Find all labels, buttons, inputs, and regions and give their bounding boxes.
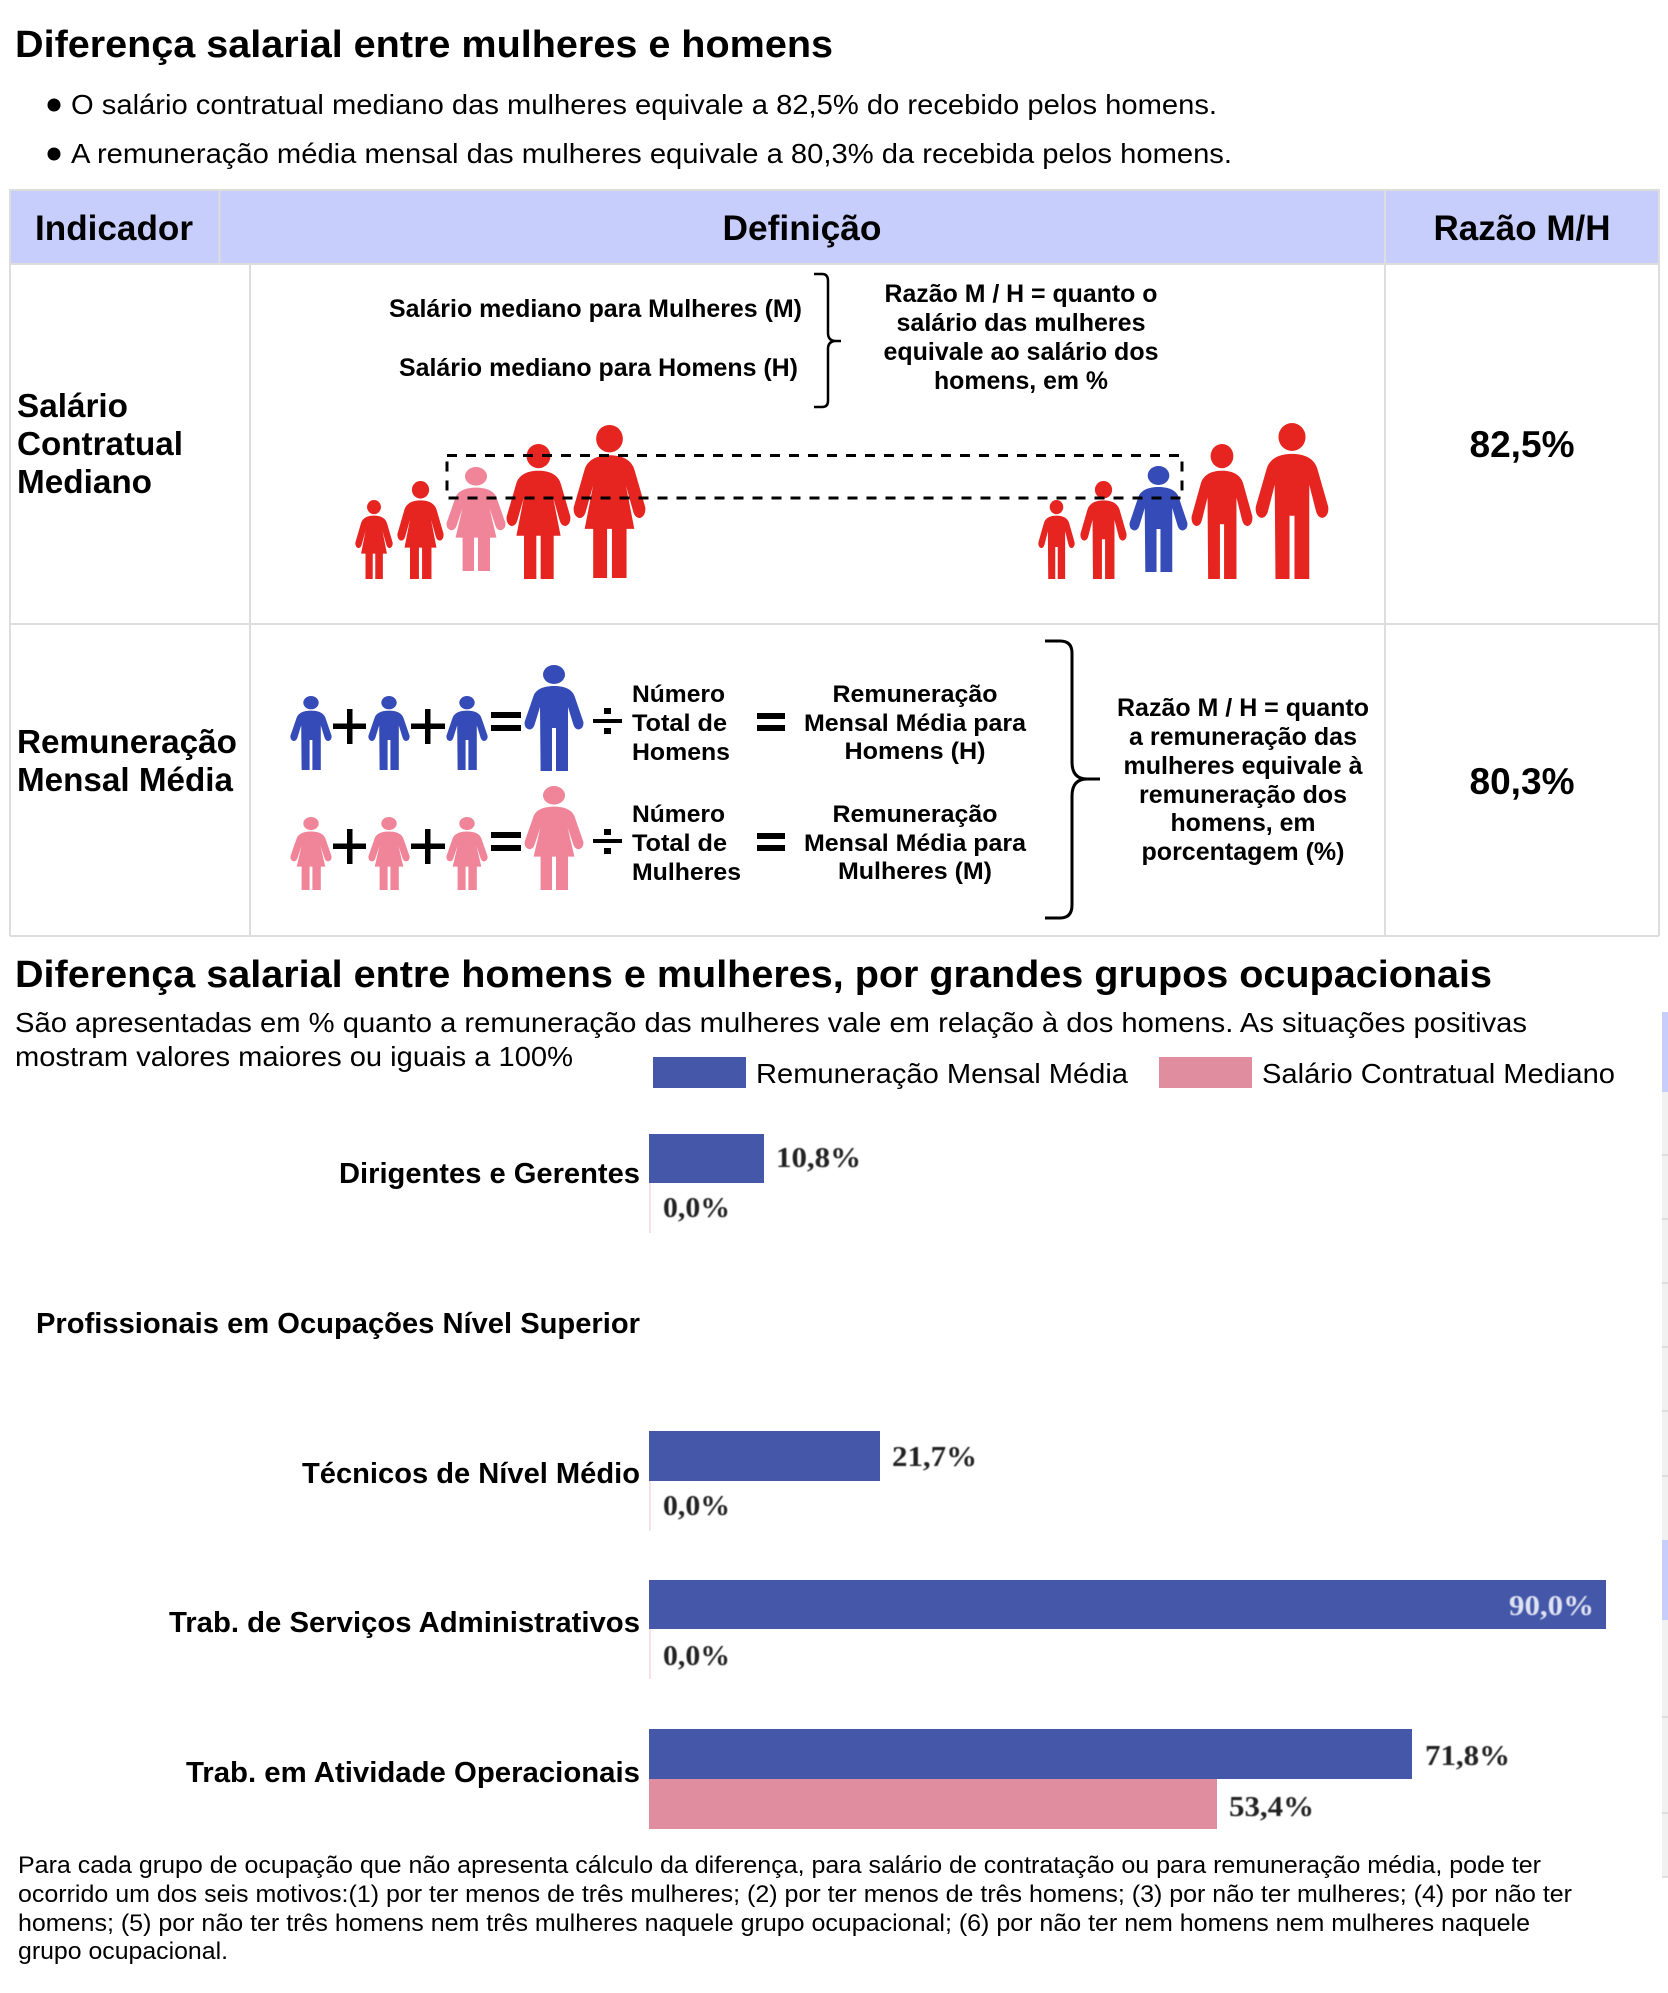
dashed median box [447,456,1182,498]
ratio definition: median: equivale ao salário dos [884,338,1158,366]
row label: Salário Contratual Mediano: Salário [17,387,128,424]
row label: Remuneração Mensal Média: Remuneração [17,723,237,760]
bars: Trab. em Atividade Operacionais: 71,8% [1425,1740,1510,1772]
ratio definition: average: homens, em [1170,809,1316,837]
ratio definition: median: Razão M / H = quanto o [884,280,1158,308]
median salary labels: Salário mediano para Homens (H) [399,354,798,382]
chart legend [653,1057,1615,1089]
bullet 2: A remuneração média mensal das mulheres equivale a 80,3% da recebida pelos homens. [71,138,1232,169]
category labels: Trab. em Atividade Operacionais [186,1757,640,1789]
ratio definition: average: Razão M / H = quanto [1117,694,1369,722]
median salary labels: Salário mediano para Mulheres (M) [389,295,802,323]
formula: men [290,665,1026,771]
bars: Trab. de Serviços Administrativos: 0,0% [663,1640,730,1672]
table header row: Razão M/H [1434,209,1610,248]
formula: women: Mensal Média para [804,830,1026,857]
value: 82,5%: 82,5% [1470,424,1574,465]
bar chart [36,1134,1606,1829]
median salary labels [389,295,802,382]
chart subtitle: mostram valores maiores ou iguais a 100% [15,1041,573,1072]
ratio definition: average: porcentagem (%) [1142,838,1344,866]
row label: Remuneração Mensal Média [17,723,237,798]
heading: occupational groups: Diferença salarial entre homens e mulheres, por grandes grupos ocupacionais [15,954,1492,996]
bars: Trab. em Atividade Operacionais: 53,4% [1229,1791,1314,1823]
cropped table sliver at right edge [1662,1012,1668,1877]
formula: women: Mulheres (M) [838,858,992,885]
bars: Trab. de Serviços Administrativos [649,1580,1606,1679]
ratio definition: average: remuneração dos [1139,781,1347,809]
footnote: homens; (5) por não ter três homens nem três mulheres naquele grupo ocupacional; (6) por não ter nem homens nem mulheres naquele [18,1910,1530,1937]
footnote: grupo ocupacional. [18,1938,228,1965]
bullet list [48,89,1232,169]
icons: men ranked by salary [1038,423,1328,579]
ratio definition: average: a remuneração das [1129,723,1357,751]
brace: median [814,274,841,407]
table header row: Indicador [35,209,193,248]
chart legend: Salário Contratual Mediano [1262,1058,1615,1089]
ratio definition: median [884,280,1158,395]
bars: Dirigentes e Gerentes [649,1134,861,1233]
brace: average [1045,641,1100,918]
bars: Dirigentes e Gerentes: 10,8% [776,1142,861,1174]
table header row: Definição [722,209,882,248]
chart legend: Remuneração Mensal Média [756,1058,1128,1089]
bars: Trab. em Atividade Operacionais [649,1729,1510,1829]
category labels [36,1158,640,1789]
title: wage gap: Diferença salarial entre mulheres e homens [15,24,833,66]
formula: women: Total de [632,830,727,857]
category labels: Técnicos de Nível Médio [302,1458,640,1490]
bars: Técnicos de Nível Médio [649,1431,977,1531]
chart subtitle [15,1007,1527,1072]
formula: women: Remuneração [832,801,998,828]
formula: men: Total de [632,710,727,737]
formula: women [290,786,1026,890]
formula: men: Homens [632,739,730,766]
value: 80,3%: 80,3% [1470,761,1574,802]
category labels: Trab. de Serviços Administrativos [169,1607,640,1639]
bars: Trab. de Serviços Administrativos: 90,0% [1509,1590,1594,1622]
formula: men: Número [632,681,725,708]
ratio definition: average: mulheres equivale à [1124,752,1363,780]
formula: men: Homens (H) [844,738,986,765]
row label: Salário Contratual Mediano: Mediano [17,463,152,500]
formula: men: Remuneração [832,681,998,708]
footnote: ocorrido um dos seis motivos:(1) por ter menos de três mulheres; (2) por ter menos de três homens; (3) por não ter mulheres; (4) por não ter [18,1881,1572,1908]
category labels: Dirigentes e Gerentes [339,1158,640,1190]
icons: women ranked by salary [355,425,645,579]
row label: Salário Contratual Mediano [17,387,183,500]
category labels: Profissionais em Ocupações Nível Superior [36,1308,640,1340]
bars: Técnicos de Nível Médio: 0,0% [663,1490,730,1522]
ratio definition: average [1117,694,1369,866]
ratio definition: median: homens, em % [934,367,1108,395]
footnote [18,1852,1572,1965]
bars: Técnicos de Nível Médio: 21,7% [892,1441,977,1473]
formula: women: Mulheres [632,859,741,886]
bars: Dirigentes e Gerentes: 0,0% [663,1192,730,1224]
ratio definition: median: salário das mulheres [896,309,1146,337]
row label: Salário Contratual Mediano: Contratual [17,425,183,462]
formula: women: Número [632,801,725,828]
table header row [10,190,1659,264]
indicator table [10,190,1659,936]
formula: men: Mensal Média para [804,710,1026,737]
row label: Remuneração Mensal Média: Mensal Média [17,761,234,798]
bullet 1: O salário contratual mediano das mulheres equivale a 82,5% do recebido pelos homens. [71,89,1217,120]
chart subtitle: São apresentadas em % quanto a remuneração das mulheres vale em relação à dos homens. As situações positivas [15,1007,1527,1038]
footnote: Para cada grupo de ocupação que não apresenta cálculo da diferença, para salário de contratação ou para remuneração média, pode ter [18,1852,1541,1879]
